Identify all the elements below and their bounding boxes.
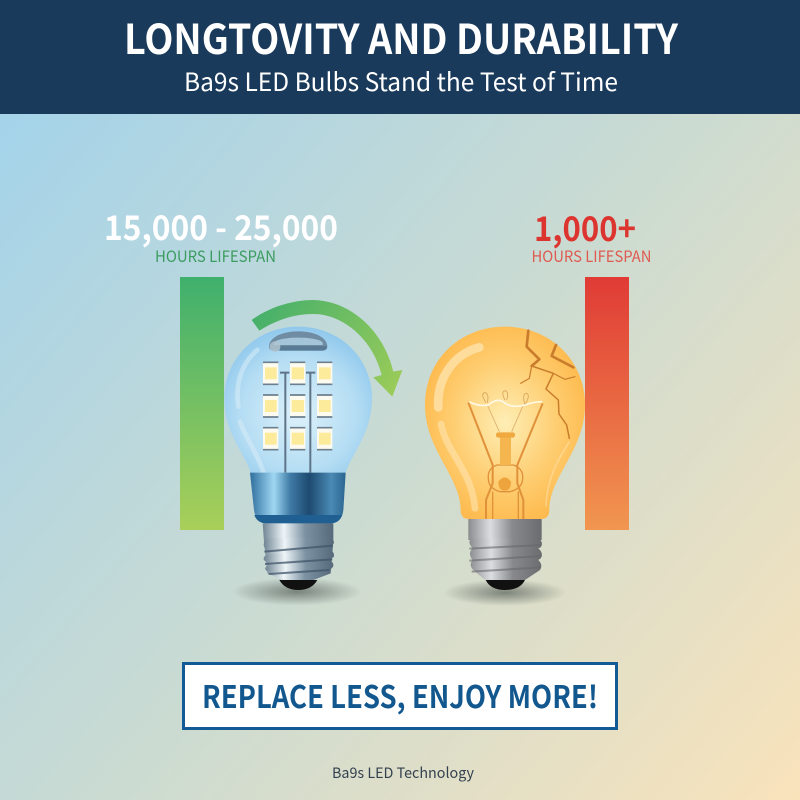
header banner (0, 0, 800, 114)
incandescent lifespan bar (585, 277, 629, 530)
subtitle: Ba9s LED Bulbs Stand the Test of Time (184, 63, 618, 99)
callout: replace less (184, 664, 616, 728)
rotation arrow (252, 300, 402, 397)
cracks (521, 331, 575, 438)
incandescent bulb (425, 327, 585, 606)
LED lifespan bar (180, 277, 224, 530)
incandescent lifespan figure: 1,000+ (534, 202, 636, 251)
LED lifespan figure: 15,000 - 25,000 (104, 201, 338, 250)
filament (468, 391, 543, 519)
LED bulb (224, 327, 372, 606)
footer: Ba9s LED Technology (332, 762, 474, 783)
incandescent lifespan label: HOURS LIFESPAN (532, 245, 652, 267)
callout: replace less: REPLACE LESS, ENJOY MORE! (202, 672, 598, 717)
screw base (263, 523, 333, 580)
screw base (468, 519, 542, 540)
title: LONGTOVITY AND DURABILITY (124, 6, 679, 66)
LED lifespan label: HOURS LIFESPAN (155, 245, 276, 267)
